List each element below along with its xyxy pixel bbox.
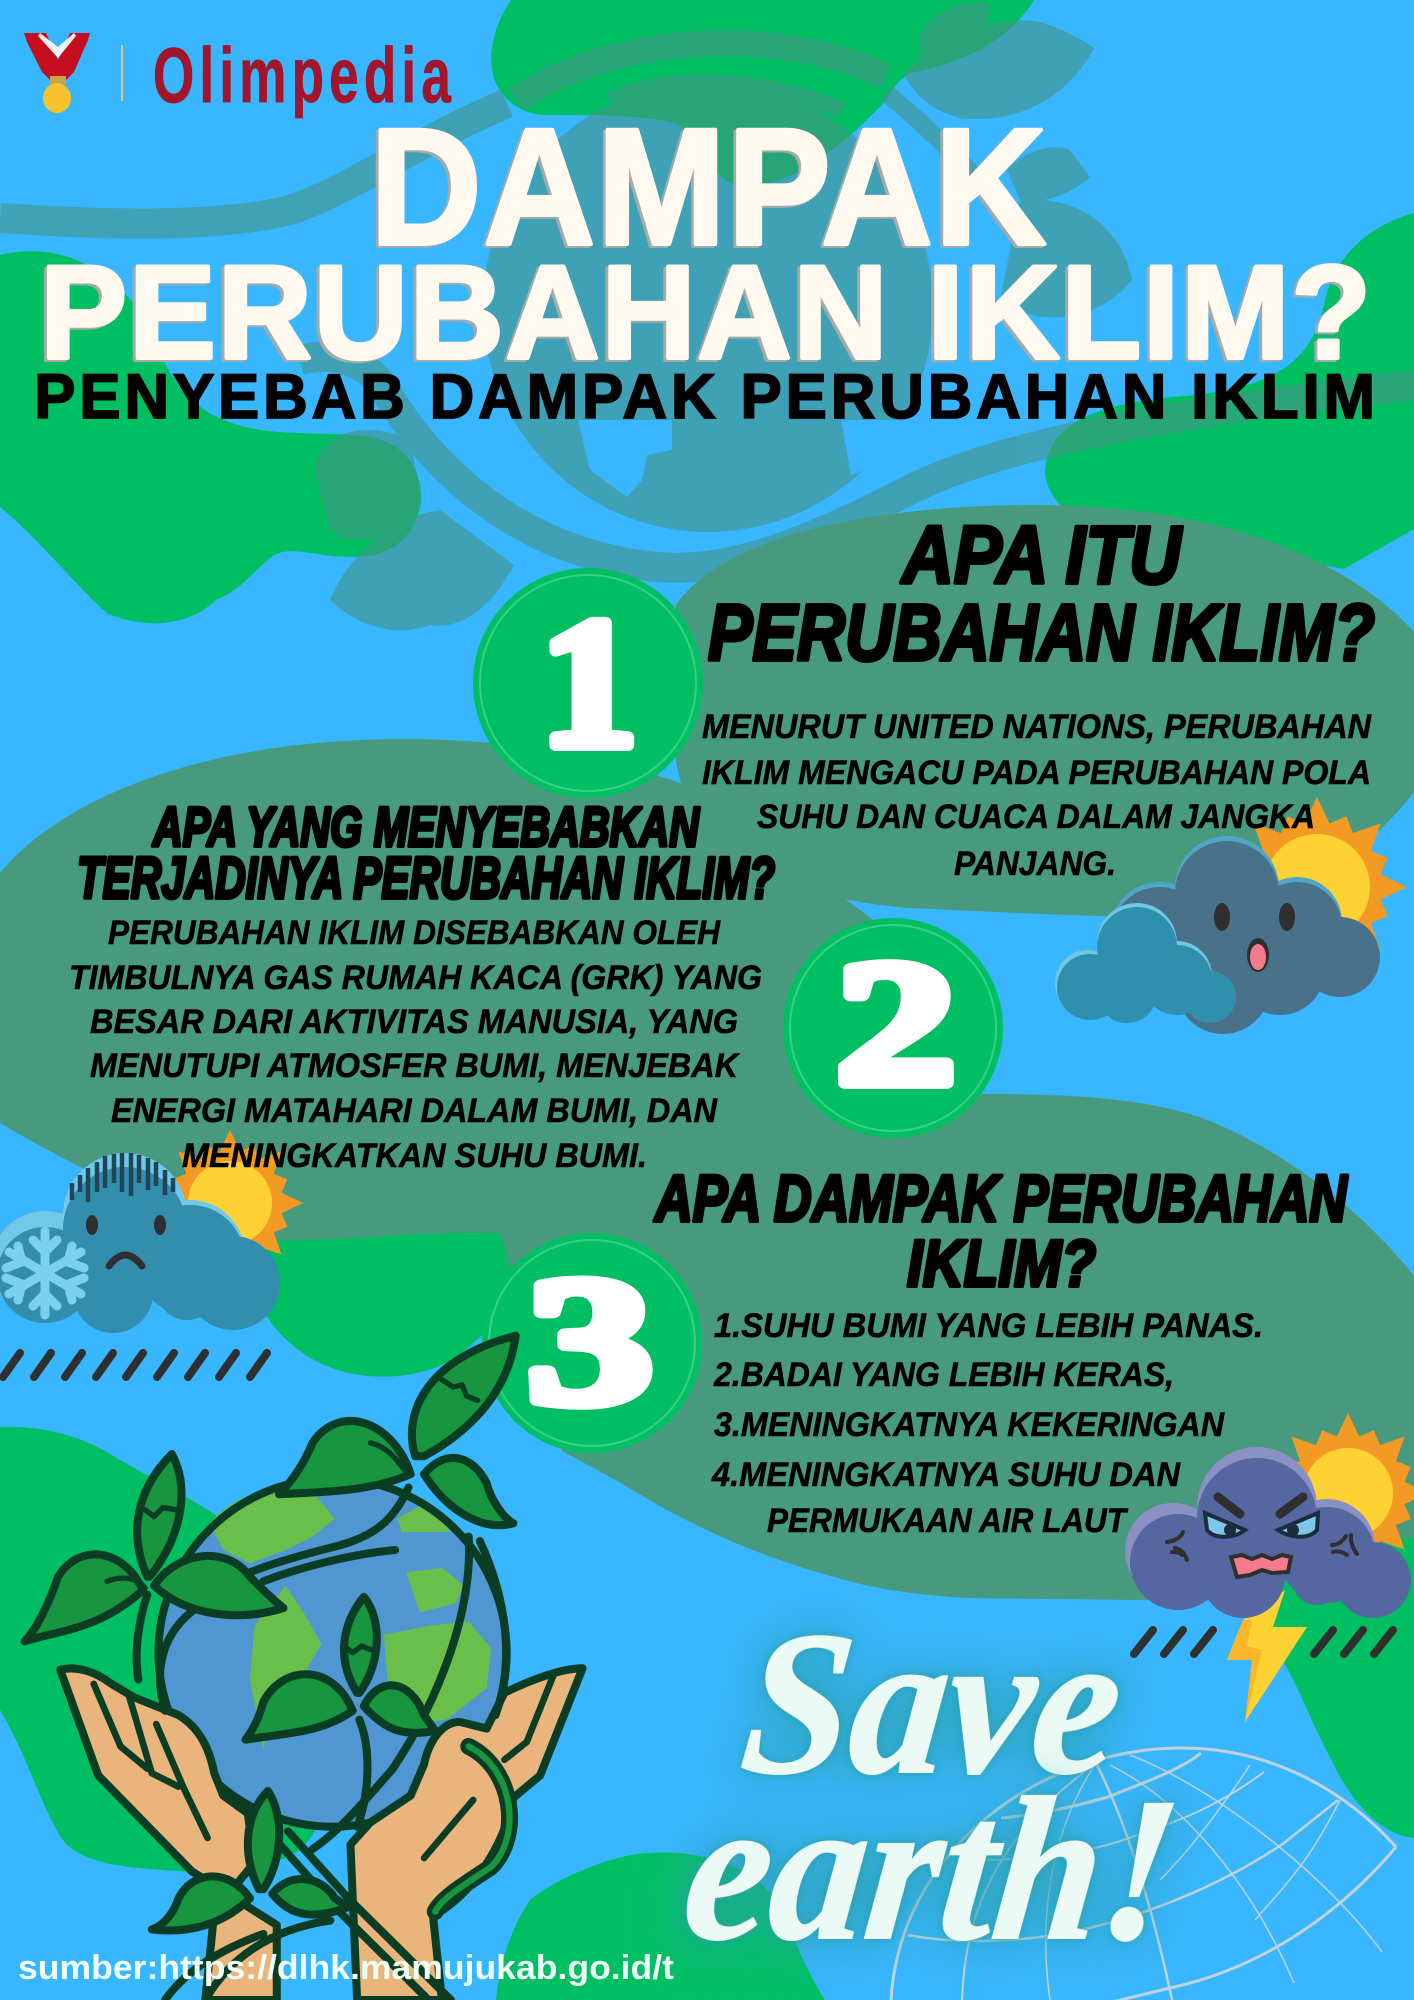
number badge 2 [783,918,1003,1138]
text block: section 1 [702,708,1372,883]
logo wordmark: Olimpedia [153,33,452,120]
number badge 3 [482,1233,702,1453]
list: section 3 [711,1307,1263,1540]
number badge 1 [473,568,703,798]
icon: angry storm cloud with sun [1125,1413,1414,1722]
icon: snowflake [6,1231,84,1315]
text block: section 2: PERUBAHAN IKLIM DISEBABKAN OLEH [108,914,721,952]
heading: section 3 [653,1161,1348,1300]
watermark: ocean inlets on globe [578,420,907,497]
heading: section 3: IKLIM? [907,1226,1096,1300]
icon: rain strokes left [3,1353,267,1377]
subtitle: PENYEBAB DAMPAK PERUBAHAN IKLIM [34,362,1375,432]
list: section 3: PERMUKAAN AIR LAUT [767,1502,1129,1540]
text block: section 1: PANJANG. [954,845,1116,883]
number badge 1: 1 [540,581,638,786]
title: Dampak Perubahan Iklim [40,94,1371,386]
icon: lightning bolt [1227,1590,1307,1722]
logo: Olimpedia [24,33,452,120]
number badge 2: 2 [836,924,956,1122]
list: section 3: 1.SUHU BUMI YANG LEBIH PANAS. [714,1307,1263,1345]
list: section 3: 2.BADAI YANG LEBIH KERAS, [713,1356,1174,1394]
panels: explanatory bands [0,505,1414,1600]
icon: icicle lines [72,1153,173,1202]
heading: section 1 [708,510,1375,677]
heading: section 2: APA YANG MENYEBABKAN [152,795,700,858]
list: section 3: 3.MENINGKATNYA KEKERINGAN [714,1406,1225,1444]
icon: surprised cloud with sun [1055,797,1407,1034]
number badge 3: 3 [527,1241,653,1442]
text block: section 1: IKLIM MENGACU PADA PERUBAHAN POLA [702,754,1371,792]
list: section 3: 4.MENINGKATNYA SUHU DAN [711,1456,1181,1494]
heading: section 2: TERJADINYA PERUBAHAN IKLIM? [77,846,775,911]
hand lines [94,1675,554,1858]
text block: section 2: TIMBULNYA GAS RUMAH KACA (GRK) YANG [69,959,762,997]
leaves [25,1336,516,1931]
text: last line of section 2, over the sun: MENINGKATKAN SUHU BUMI. [182,1137,647,1175]
heading: section 1: APA ITU [900,510,1183,601]
title: Dampak Perubahan Iklim: DAMPAK [370,94,1046,279]
slogan: Save earth [675,1591,1189,1983]
hands [60,1668,583,2000]
slogan: Save earth: Save [733,1591,1132,1817]
text block: section 2 [69,914,762,1130]
icon: rain strokes right [1134,1630,1393,1654]
icon: cold sad cloud with sun [0,1130,647,1333]
text block: section 2: MENUTUPI ATMOSFER BUMI, MENJEBAK [90,1047,740,1085]
watermark: globe and plant [0,2,1414,630]
title: Dampak Perubahan Iklim: PERUBAHAN IKLIM? [40,238,1371,386]
source link: sumber:https://dlhk.mamujukab.go.id/t [18,1949,674,1987]
slogan: Save earth: earth! [675,1757,1189,1983]
globe [158,1479,507,1827]
text block: section 1: MENURUT UNITED NATIONS, PERUBAHAN [702,708,1372,746]
heading: section 2 [77,795,775,911]
vine right [435,1746,510,1912]
stems [137,1487,506,2000]
text block: section 1: SUHU DAN CUACA DALAM JANGKA [757,798,1315,836]
leaf details [107,1378,478,1653]
icon: plant and globe in hands [25,1336,583,2000]
text block: section 2: BESAR DARI AKTIVITAS MANUSIA, YANG [90,1003,738,1041]
icon: medal [24,33,90,113]
icon: globe wireframe [891,1748,1396,2000]
text block: section 2: ENERGI MATAHARI DALAM BUMI, DAN [111,1092,718,1130]
